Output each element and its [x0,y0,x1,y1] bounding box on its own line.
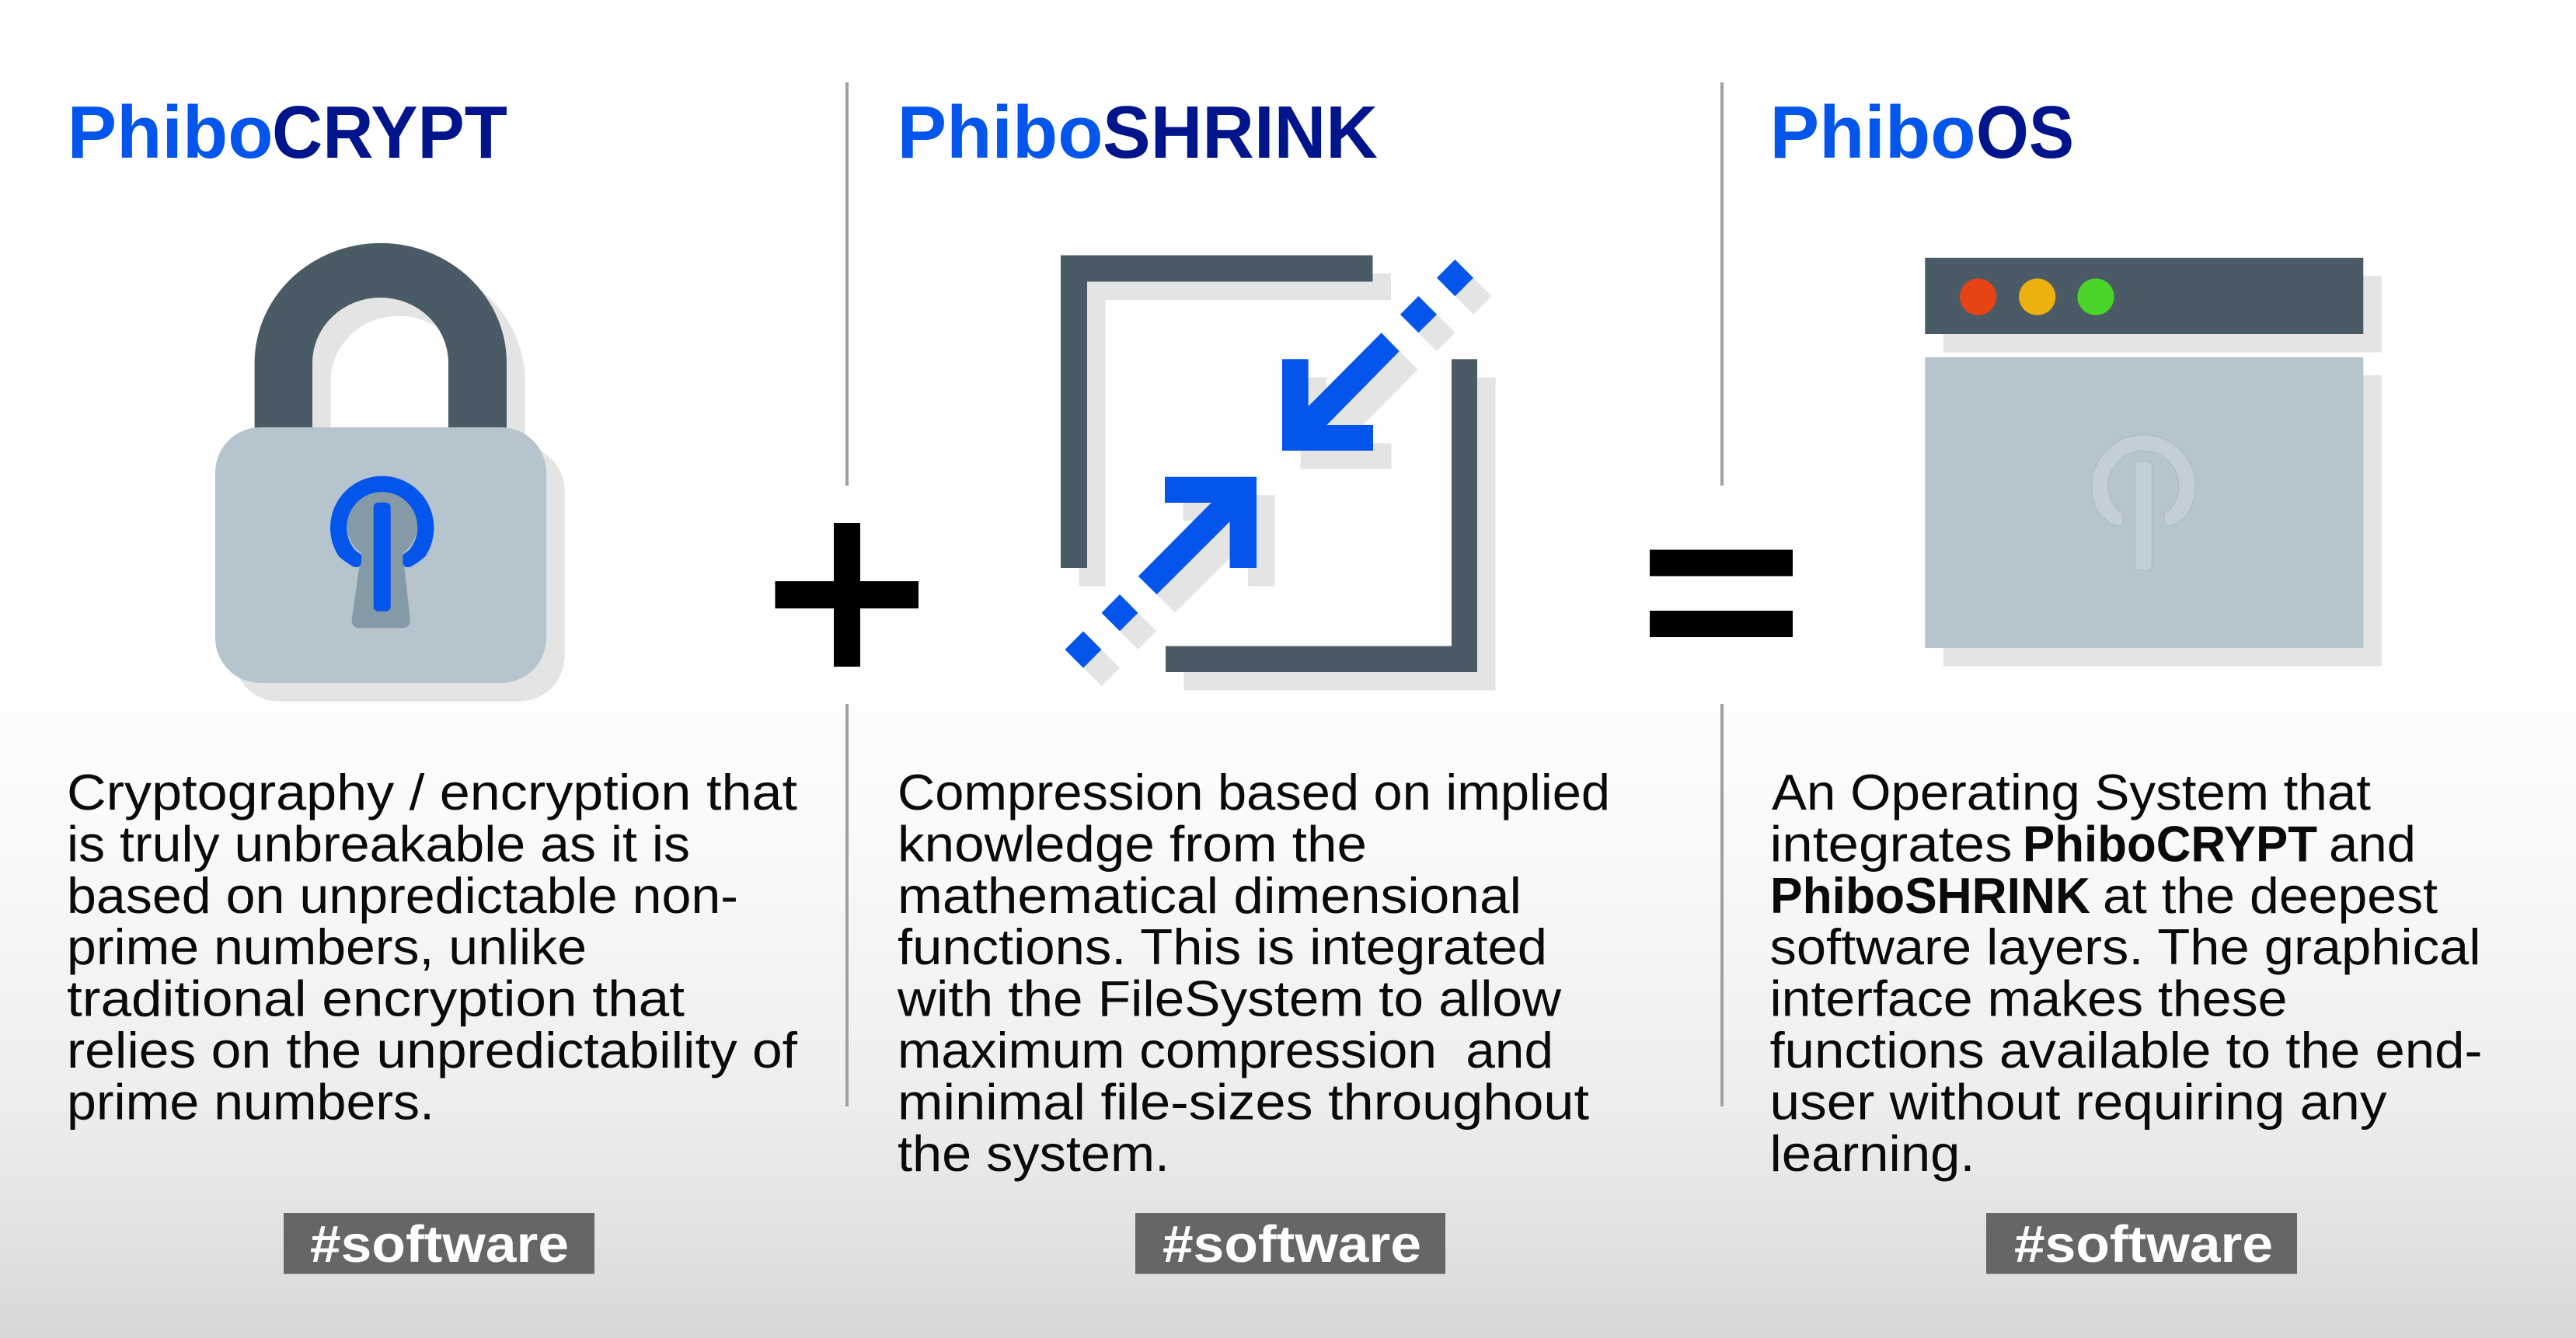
panel: PhiboCRYPT [67,91,798,1274]
text: PhiboSHRINK description: with the FileSystem to allow [897,970,1562,1027]
text: PhiboOS description: interface makes these [1770,970,2288,1027]
text: PhiboCRYPT description: is truly unbreakable as it is [67,815,690,872]
text: PhiboSHRINK description: minimal file-sizes throughout [898,1073,1589,1130]
text: PhiboSHRINK description [897,764,1610,1182]
text: PhiboCRYPT description: Cryptography / encryption that [67,764,797,821]
panel: PhiboOS [1770,91,2482,1274]
text: PhiboOS description: functions available to the end- [1770,1022,2482,1078]
text: PhiboSHRINK description: functions. This is integrated [898,918,1547,975]
tag: #software: #software [2014,1215,2273,1274]
heading: PhiboCRYPT [67,91,507,174]
heading: PhiboOS: Phibo [1770,91,1975,174]
text: PhiboCRYPT description: traditional encryption that [67,970,685,1027]
icon: plus sign [776,523,919,667]
icon: equals sign [1650,550,1793,637]
text: PhiboSHRINK description: maximum compression and [898,1022,1553,1078]
text: PhiboCRYPT description: relies on the unpredictability of [67,1022,798,1078]
panel: PhiboSHRINK [897,91,1610,1274]
icon: application window [1925,258,2382,667]
icon: power symbol [2092,435,2195,570]
heading: PhiboCRYPT: Phibo [67,91,274,174]
tag: #software: #software [1163,1215,1421,1274]
text: PhiboCRYPT description [67,764,798,1130]
icon: padlock [215,243,564,702]
text: PhiboSHRINK description: Compression based on implied [898,764,1610,821]
heading: PhiboOS [1770,91,2074,174]
text: PhiboOS description: software layers. The graphical [1770,918,2480,975]
heading: PhiboSHRINK: Phibo [897,91,1103,174]
heading: PhiboSHRINK: SHRINK [1103,91,1378,174]
text: PhiboOS description: user without requiring any [1770,1073,2387,1130]
text: PhiboOS description: integrates [1770,815,2013,872]
text: PhiboCRYPT description: prime numbers, unlike [67,918,587,975]
text: PhiboOS description [1770,764,2482,1182]
text: PhiboOS description: and [2329,815,2416,872]
text: PhiboOS description: PhiboCRYPT [2023,815,2317,872]
text: PhiboOS description: at the deepest [2103,867,2438,924]
text: PhiboCRYPT description: based on unpredictable non- [67,867,738,924]
heading: PhiboOS: OS [1976,91,2074,174]
text: PhiboSHRINK description: the system. [898,1125,1169,1182]
text: PhiboOS description: An Operating System that [1772,764,2371,821]
heading: PhiboSHRINK [897,91,1378,174]
text: PhiboCRYPT description: prime numbers. [67,1073,434,1130]
text: PhiboSHRINK description: mathematical dimensional [898,867,1522,924]
tag: #software: #software [310,1215,569,1274]
text: PhiboOS description: PhiboSHRINK [1770,867,2090,924]
text: PhiboSHRINK description: knowledge from the [898,815,1367,872]
text: PhiboOS description: learning. [1770,1125,1975,1182]
heading: PhiboCRYPT: CRYPT [272,91,507,174]
icon: compress arrows in frame [1061,255,1495,690]
